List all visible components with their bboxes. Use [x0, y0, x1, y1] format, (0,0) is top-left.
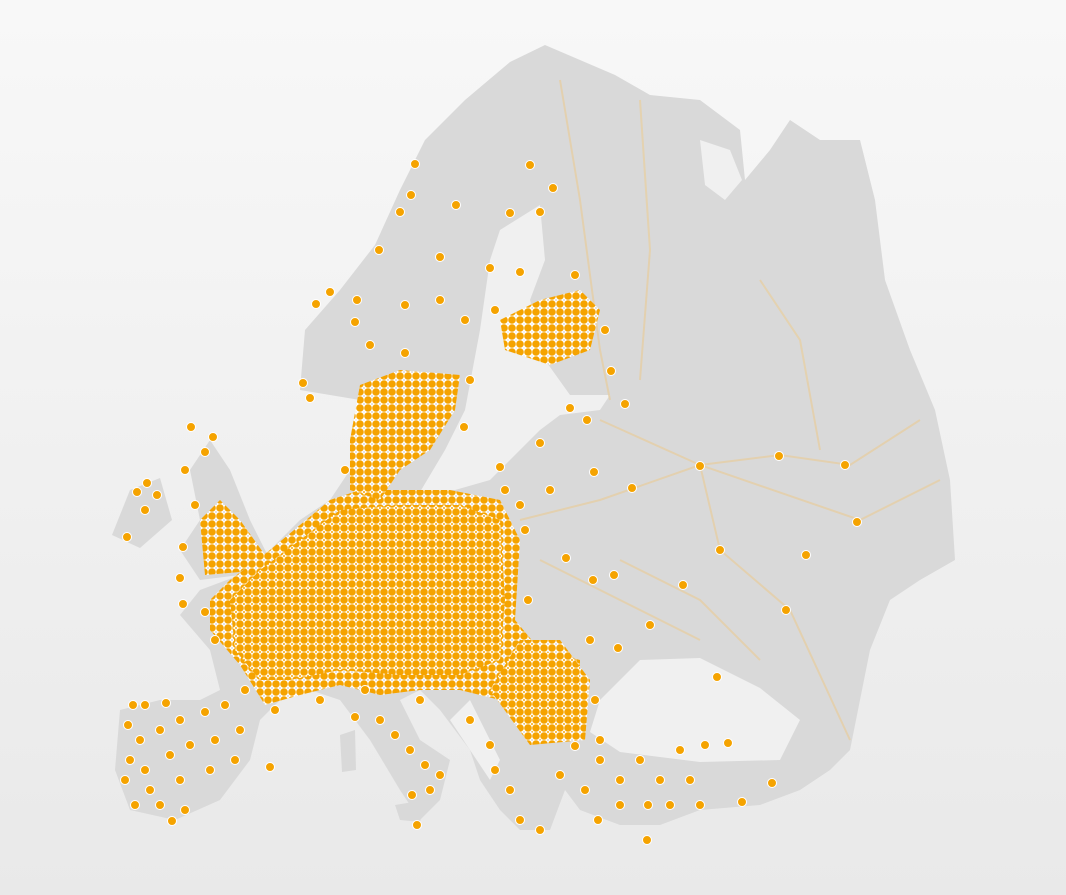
- land: Sicily / Sardinia: [395, 800, 425, 822]
- roads: [520, 80, 940, 740]
- dot cluster: Britain: [200, 500, 265, 575]
- dense dot cluster: central Europe: [210, 490, 580, 740]
- scattered dots: [120, 160, 862, 844]
- land: Ireland: [112, 478, 172, 548]
- land: Great Britain: [180, 440, 270, 580]
- dot cluster: Denmark / south Sweden: [350, 370, 460, 500]
- land: mainland Europe: [112, 45, 955, 830]
- dot cluster: Finland: [500, 290, 600, 365]
- dot cluster: Balkans: [490, 640, 590, 745]
- seas: Baltic, White Sea and Black Sea: [420, 140, 800, 780]
